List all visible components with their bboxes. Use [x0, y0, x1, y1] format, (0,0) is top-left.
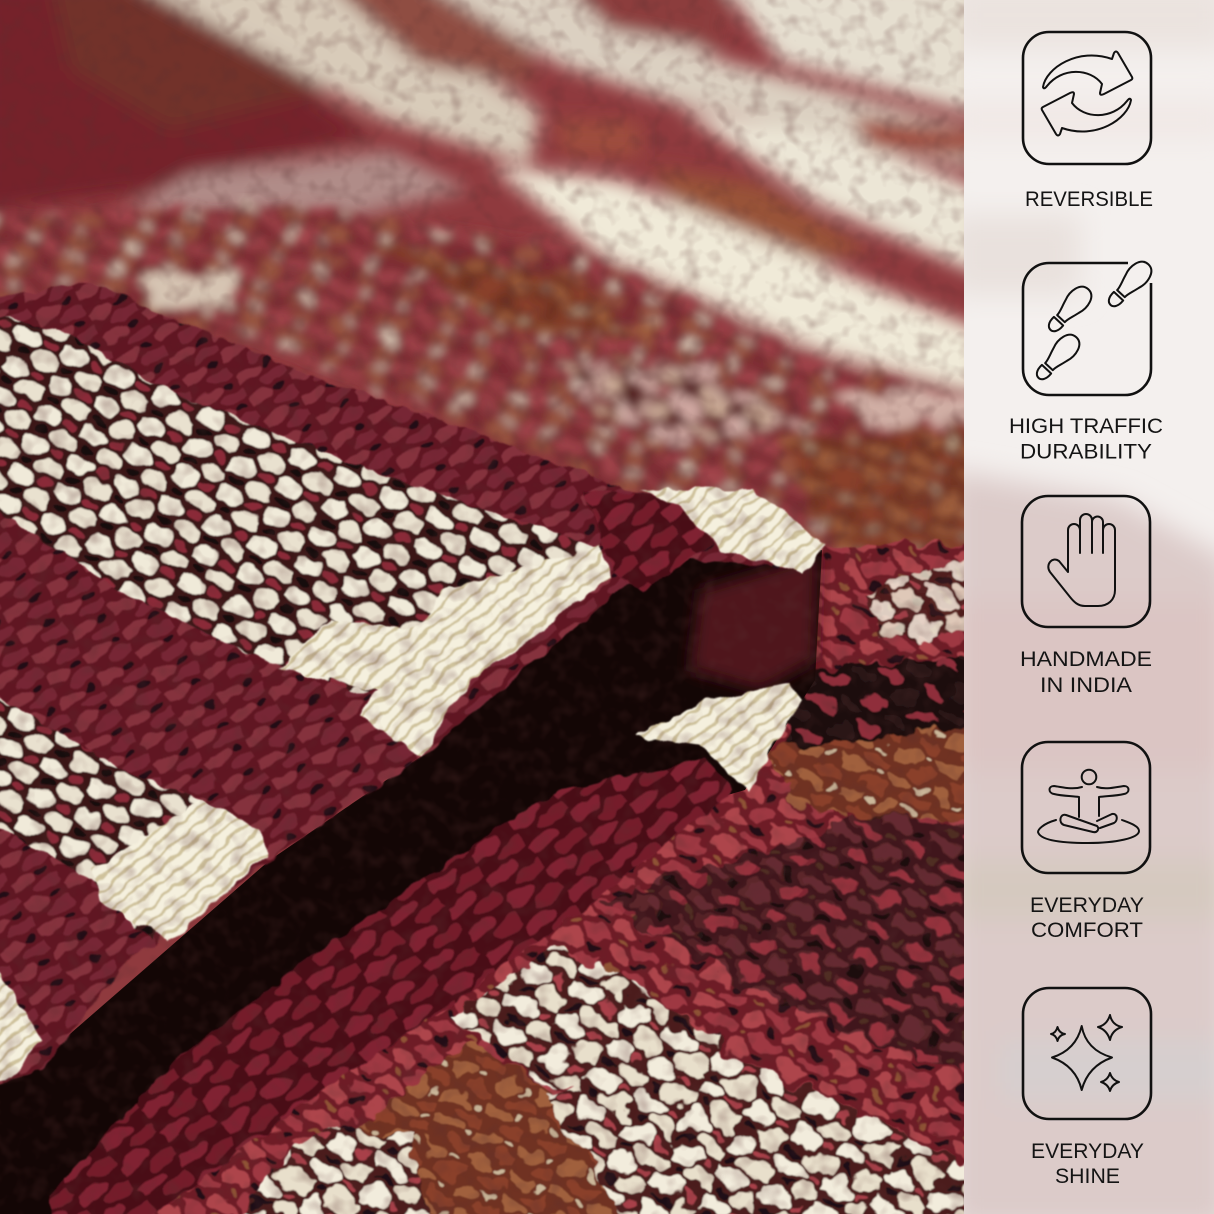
- feature: handmade in india: [1020, 496, 1152, 697]
- panel: faded background tones: [950, 0, 1214, 1214]
- label: high traffic durability: HIGH TRAFFIC: [1009, 414, 1163, 438]
- flap: maroon rope edge: [585, 490, 712, 592]
- label: high traffic durability: DURABILITY: [1020, 440, 1152, 464]
- folded flap: maroon weave: [0, 283, 818, 1090]
- cream underside edge: [635, 684, 802, 790]
- label: everyday shine: SHINE: [1055, 1164, 1120, 1188]
- flap: cream edge binding: [0, 488, 826, 1085]
- label: everyday shine: [1031, 1139, 1144, 1188]
- feature: high traffic durability: [1009, 257, 1163, 464]
- icon: reversible arrows: [1023, 32, 1151, 164]
- label: handmade in india: HANDMADE: [1020, 647, 1152, 671]
- flap: white plaid stitches: [0, 312, 605, 690]
- label: everyday comfort: [1030, 893, 1144, 942]
- feature: everyday shine: [1023, 988, 1151, 1188]
- label: everyday comfort: COMFORT: [1031, 918, 1143, 942]
- label: reversible: REVERSIBLE: [1025, 187, 1153, 211]
- lower fold of the rug: [50, 758, 735, 1214]
- label: everyday comfort: EVERYDAY: [1030, 893, 1144, 917]
- grain texture: [0, 0, 964, 1214]
- lower plaid: white stitches: [215, 945, 1000, 1214]
- out-of-focus rug background: [0, 0, 964, 400]
- side panel: [950, 0, 1214, 1214]
- right-side red and black weave: [100, 540, 1000, 1214]
- label: handmade in india: IN INDIA: [1040, 673, 1133, 697]
- icon: sparkles: [1023, 988, 1151, 1119]
- label: high traffic durability: [1009, 414, 1163, 464]
- label: everyday shine: EVERYDAY: [1031, 1139, 1144, 1163]
- feature: reversible: [1023, 32, 1153, 211]
- mid band: soft stitches: [0, 195, 964, 549]
- dark cavity under the fold: [0, 550, 822, 1214]
- icon: footprints: [1023, 257, 1156, 395]
- icon: hand: [1022, 496, 1150, 627]
- label: handmade in india: [1020, 647, 1152, 697]
- feature: everyday comfort: [1022, 742, 1150, 942]
- icon: meditating figure: [1022, 742, 1150, 873]
